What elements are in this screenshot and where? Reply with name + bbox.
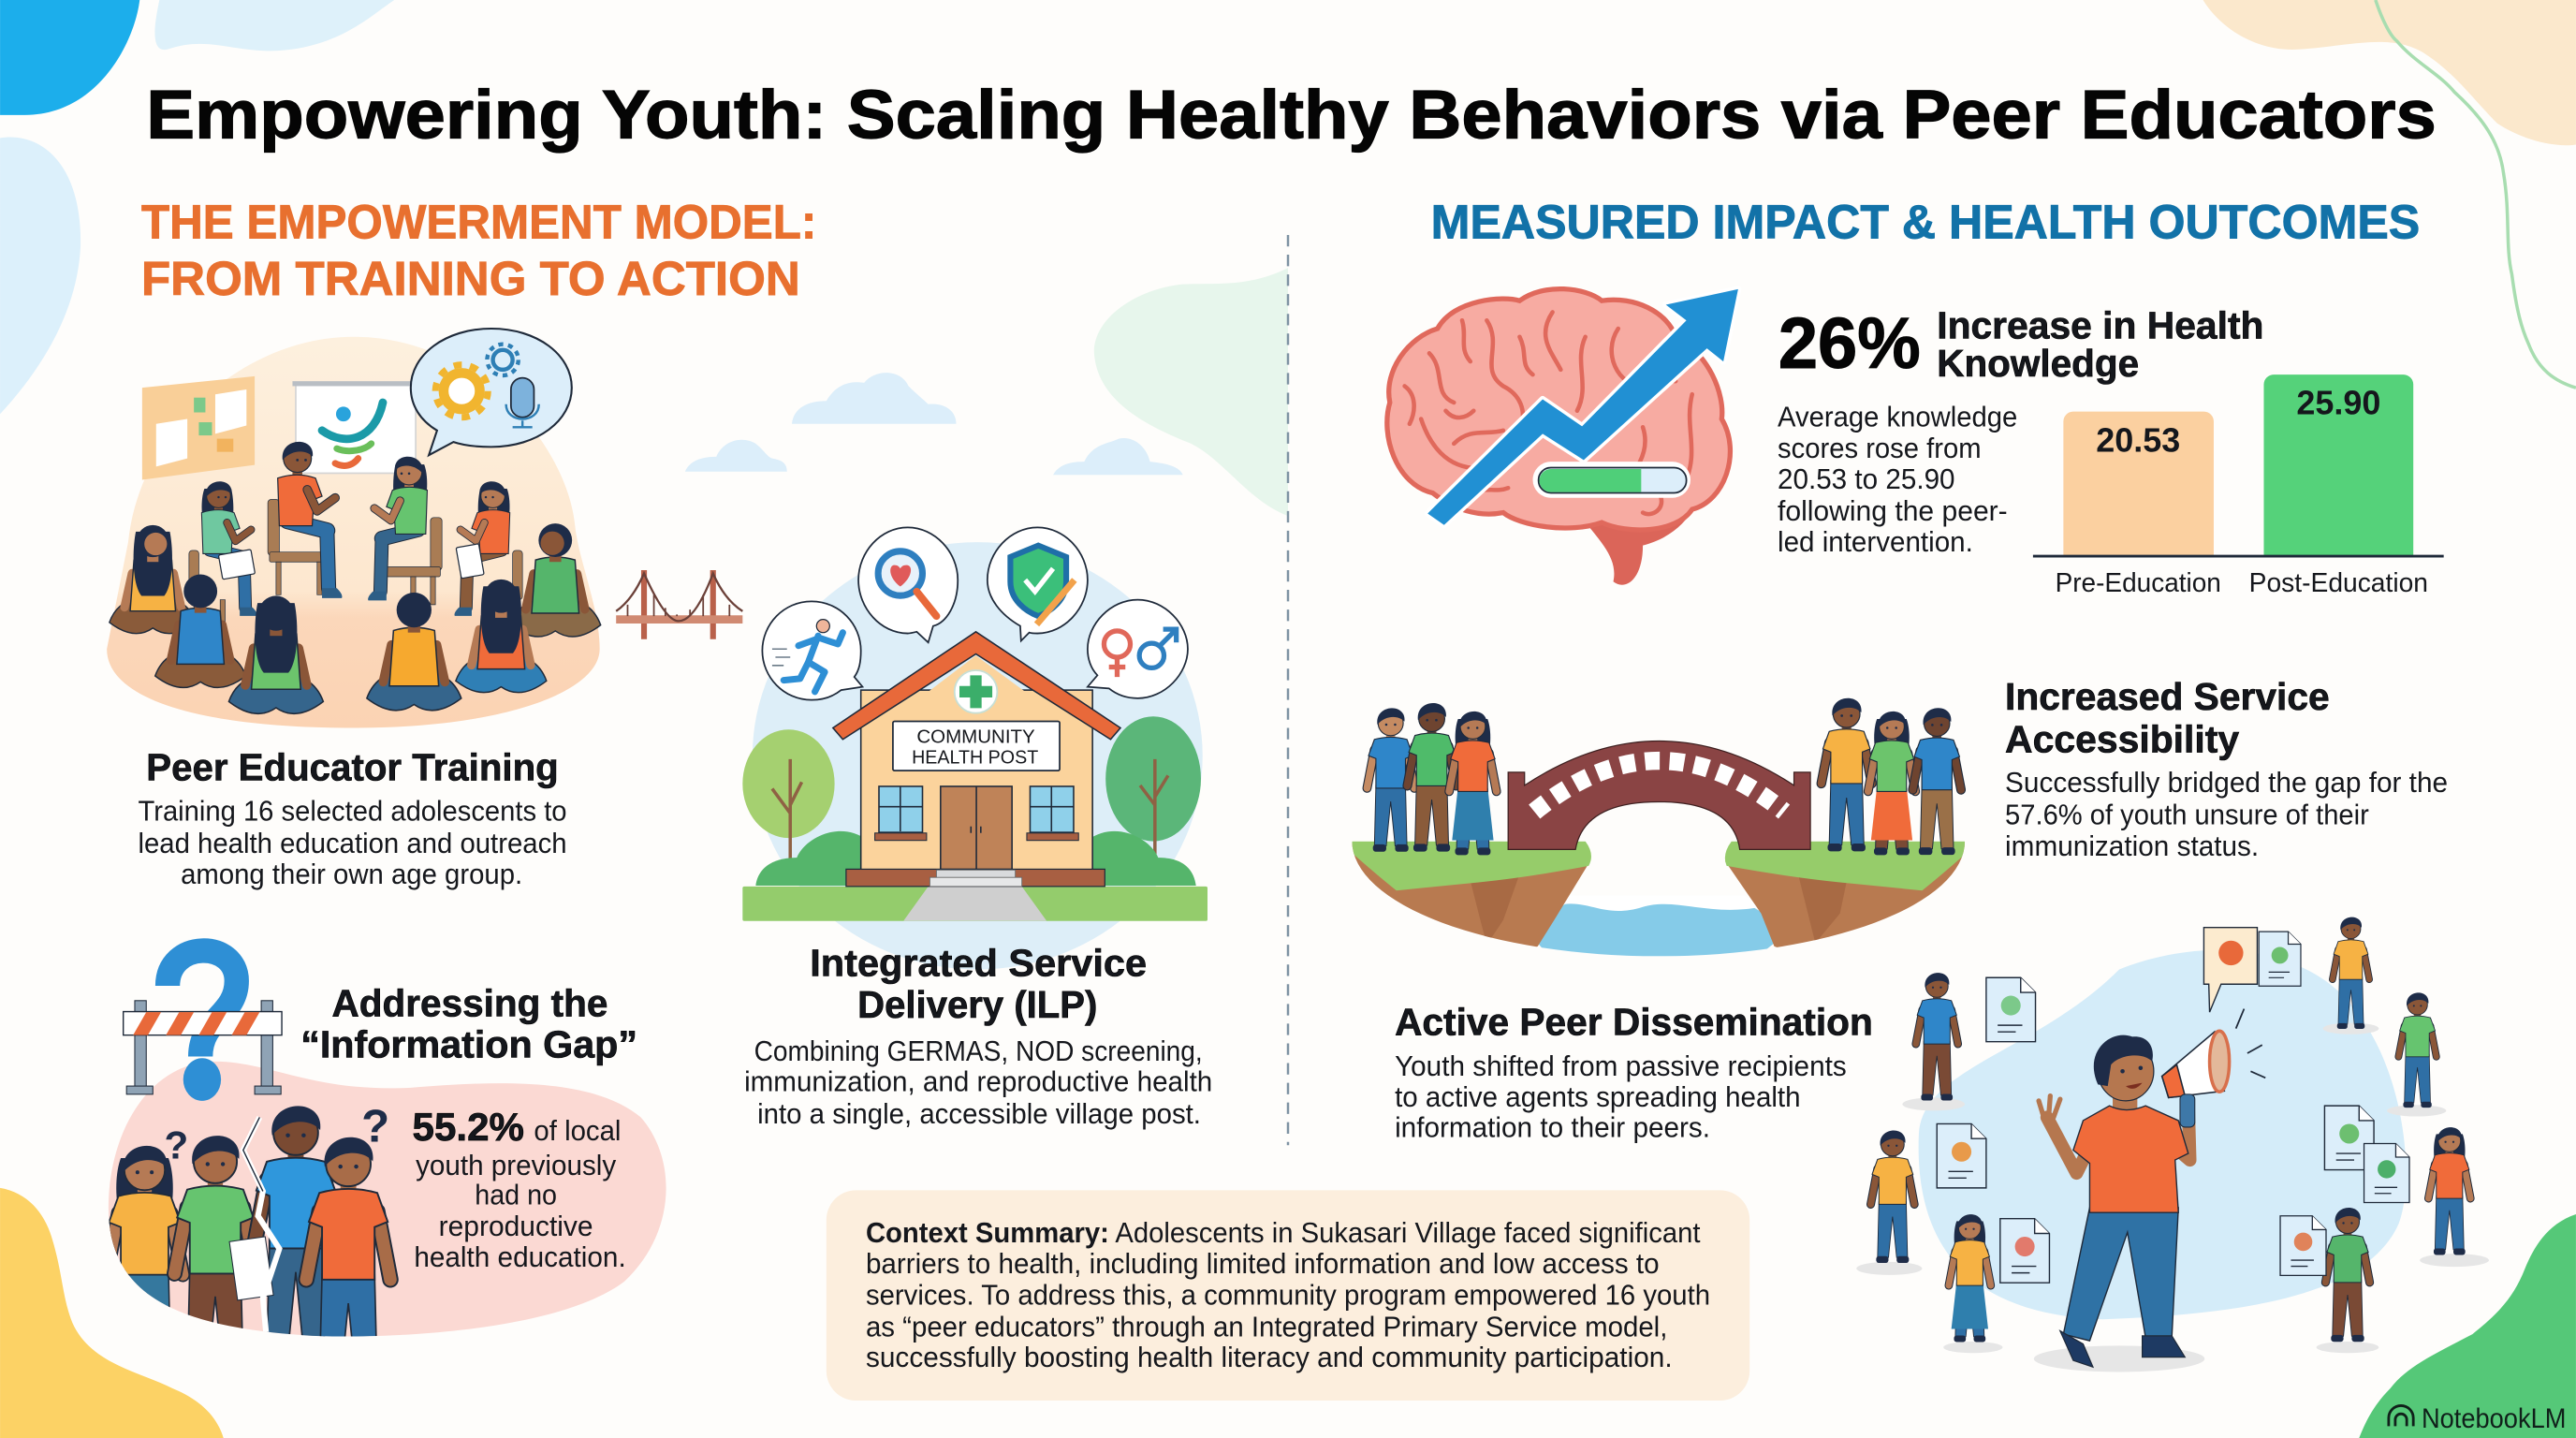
text: knowledge description: Average knowledge xyxy=(1778,401,2017,433)
heading: empowerment model: FROM TRAINING TO ACTION xyxy=(141,252,800,305)
text: peer educator training: Peer Educator Training xyxy=(146,746,559,789)
panel: information gap xyxy=(109,938,666,1337)
heading: empowerment model xyxy=(141,195,816,305)
text: increased service accessibility: 57.6% of youth unsure of their xyxy=(2005,800,2369,831)
text: active peer dissemination xyxy=(1395,1001,1873,1143)
text: knowledge description: following the peer- xyxy=(1778,495,2008,527)
heading: empowerment model: THE EMPOWERMENT MODEL: xyxy=(141,195,816,248)
text: peer educator training: among their own age group. xyxy=(181,858,522,890)
stat: 26% increase in health knowledge: Increase in Health xyxy=(1937,304,2263,347)
text: integrated service delivery: Combining GERMAS, NOD screening, xyxy=(754,1035,1203,1067)
building xyxy=(833,632,1120,887)
heading: information gap: Addressing the xyxy=(332,981,607,1024)
stat text: 55.2%: had no xyxy=(475,1179,557,1211)
icon: barrier xyxy=(124,1001,282,1094)
people: confused group xyxy=(109,1106,399,1337)
text: integrated service delivery: Integrated Service xyxy=(810,941,1147,984)
text: integrated service delivery: Delivery (ILP) xyxy=(857,983,1097,1026)
text: peer educator training: Training 16 selected adolescents to xyxy=(138,796,567,828)
stat text: 55.2%: of local xyxy=(534,1115,621,1147)
icon: question mark xyxy=(168,950,237,1101)
callout: context summary: as “peer educators” through an Integrated Primary Service model, xyxy=(866,1312,1667,1343)
stat text: 55.2%: health education. xyxy=(414,1241,626,1273)
speech bubble: gears and mic xyxy=(411,329,572,455)
sign: HEALTH POST xyxy=(912,748,1038,769)
bar chart: pre vs post education: 25.90 xyxy=(2296,383,2380,421)
callout: context summary: successfully boosting health literacy and community participation. xyxy=(866,1342,1673,1373)
text: integrated service delivery: into a single, accessible village post. xyxy=(757,1098,1201,1130)
text: peer educator training: lead health education and outreach xyxy=(138,828,567,859)
text: knowledge description: 20.53 to 25.90 xyxy=(1778,463,1955,495)
stat text: 55.2%: 55.2% xyxy=(413,1105,524,1149)
divider xyxy=(1287,235,1289,1145)
title: Empowering Youth: Scaling Healthy Behaviors via Peer Educators xyxy=(146,75,2437,153)
illustration: megaphone and peers xyxy=(1856,917,2489,1372)
stat text: 55.2%: reproductive xyxy=(439,1211,593,1242)
people in circle xyxy=(110,442,601,713)
sign: COMMUNITY xyxy=(916,726,1035,747)
text: knowledge description xyxy=(1778,401,2017,558)
text: active peer dissemination: information to their peers. xyxy=(1395,1111,1710,1143)
text: active peer dissemination: to active agents spreading health xyxy=(1395,1081,1801,1113)
clouds xyxy=(685,373,1183,475)
icon: brain with rising arrow xyxy=(1387,289,1738,585)
callout: context summary xyxy=(827,1190,1749,1401)
text: peer educator training xyxy=(138,746,567,890)
stat: 26% increase in health knowledge xyxy=(1778,303,2263,385)
illustration: bridge over gap xyxy=(1339,698,1980,969)
stone arch bridge xyxy=(1508,741,1810,849)
heading: information gap xyxy=(300,981,637,1065)
callout: context summary: services. To address this, a community program empowered 16 youth xyxy=(866,1279,1710,1311)
text: increased service accessibility xyxy=(2005,675,2448,862)
chairs xyxy=(189,500,522,640)
bubble: runner xyxy=(762,601,862,700)
peers xyxy=(1871,917,2470,1343)
callout: context summary: barriers to health, including limited information and low access to xyxy=(866,1248,1660,1280)
text: increased service accessibility: Accessibility xyxy=(2005,717,2240,760)
health documents xyxy=(1937,928,2409,1283)
heading: information gap: “Information Gap” xyxy=(300,1022,637,1065)
text: knowledge description: led intervention. xyxy=(1778,526,1973,558)
text: integrated service delivery xyxy=(744,941,1212,1130)
bubble: shield and syringe xyxy=(988,527,1088,640)
text: knowledge description: scores rose from xyxy=(1778,433,1982,464)
stat: 26% increase in health knowledge: Knowledge xyxy=(1937,342,2139,385)
text: increased service accessibility: Increased Service xyxy=(2005,675,2330,718)
bar chart: pre vs post education: Pre-Education xyxy=(2056,568,2221,598)
tree left xyxy=(742,729,835,862)
stat: 26% increase in health knowledge: 26% xyxy=(1778,303,1921,384)
icon: flipchart logo xyxy=(322,403,383,465)
bar chart: pre vs post education: Post-Education xyxy=(2249,568,2428,598)
heading: measured impact: MEASURED IMPACT & HEALTH OUTCOMES xyxy=(1431,195,2420,248)
text: active peer dissemination: Active Peer Dissemination xyxy=(1395,1001,1873,1044)
stat text: 55.2%: youth previously xyxy=(416,1150,617,1181)
ground shadows xyxy=(1856,1023,2489,1372)
main speaker with megaphone xyxy=(2039,1009,2265,1367)
panel: peer educator training illustration xyxy=(107,329,601,727)
question marks: ? xyxy=(165,1123,188,1167)
bubble: heart magnifier xyxy=(858,527,958,642)
callout: context summary: Context Summary: Adolescents in Sukasari Village faced significant xyxy=(866,1217,1701,1249)
bubble: gender symbols xyxy=(1088,600,1188,698)
text: integrated service delivery: immunization, and reproductive health xyxy=(744,1065,1212,1097)
text: increased service accessibility: immunization status. xyxy=(2005,830,2259,862)
bar chart: pre vs post education: 20.53 xyxy=(2096,421,2180,460)
people: left group xyxy=(1367,703,1497,855)
tree right xyxy=(1105,716,1201,855)
progress bar xyxy=(1532,462,1690,498)
bushes xyxy=(755,831,1196,886)
stat text: 55.2% xyxy=(413,1105,626,1273)
text: increased service accessibility: Successfully bridged the gap for the xyxy=(2005,767,2448,799)
text: active peer dissemination: Youth shifted from passive recipients xyxy=(1395,1050,1847,1082)
logo: NotebookLM: NotebookLM xyxy=(2422,1403,2566,1434)
question marks: ? xyxy=(361,1102,389,1152)
people: right group xyxy=(1822,698,1961,855)
panel: community health post illustration xyxy=(742,527,1208,969)
question marks xyxy=(165,1102,389,1167)
bar chart: pre vs post education xyxy=(2033,374,2444,598)
icon: bridge xyxy=(616,570,742,639)
sign xyxy=(893,721,1060,770)
